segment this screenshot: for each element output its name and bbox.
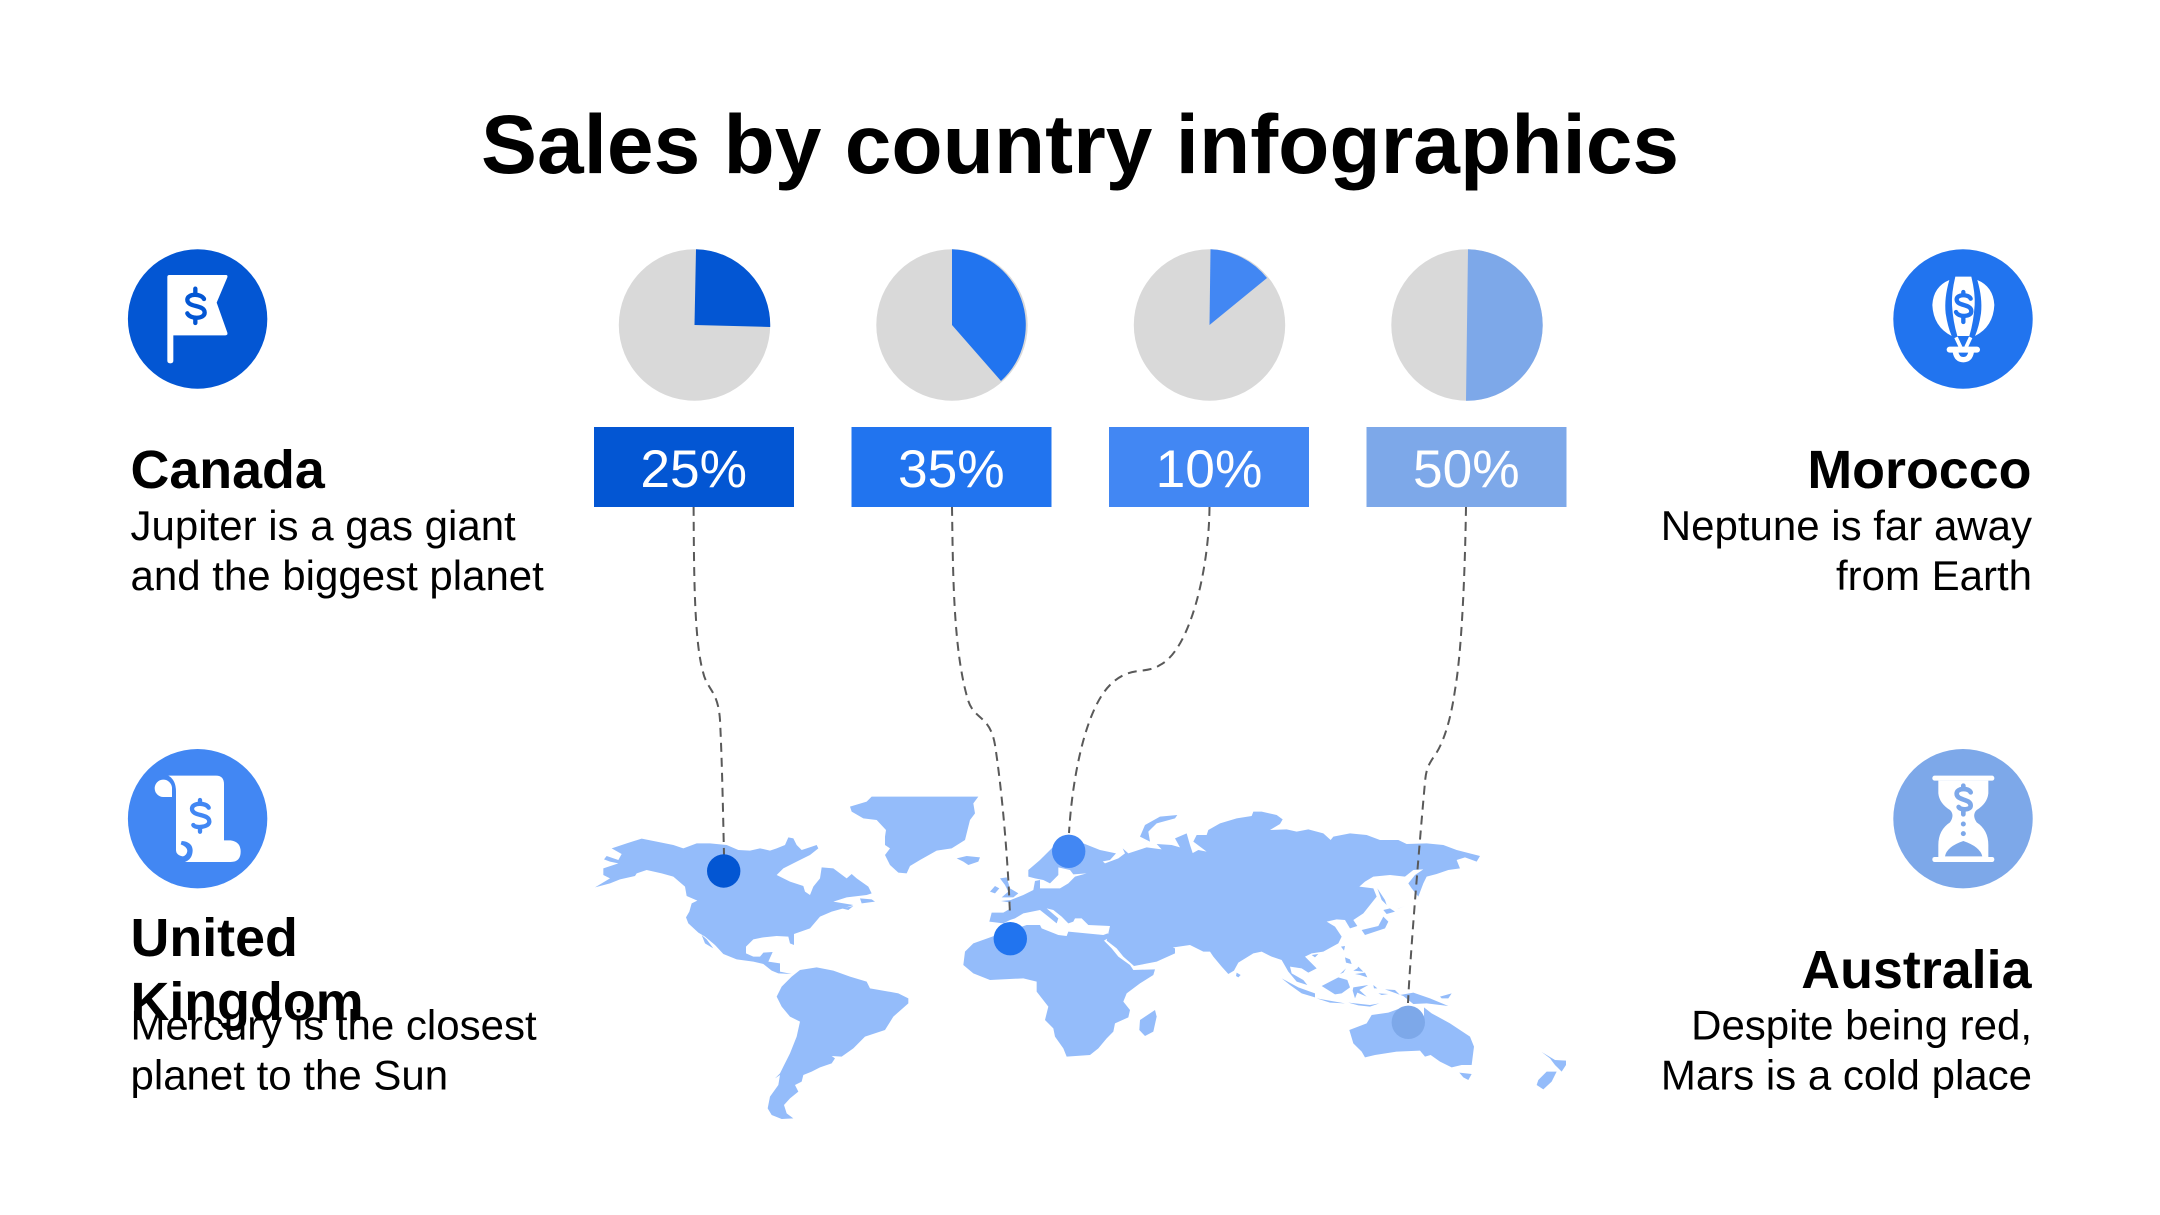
Canada text: Canada	[130, 440, 326, 500]
icon: hot air balloon with dollar	[1893, 249, 2033, 389]
map marker: United Kingdom	[1052, 835, 1085, 868]
Australia text: Mars is a cold place	[1661, 1052, 2032, 1098]
percent box: 10%: 10%	[1156, 440, 1262, 499]
United Kingdom text: United	[130, 908, 298, 968]
United Kingdom text	[130, 908, 537, 1098]
world map	[595, 797, 1566, 1119]
United Kingdom text: Kingdom	[130, 972, 364, 1032]
pie chart: 35%	[876, 249, 1028, 401]
pie chart: 10%	[1134, 249, 1285, 401]
title: Sales by country infographics	[481, 97, 1679, 191]
percent box: 25%: 25%	[640, 440, 747, 499]
icon: scroll with dollar	[128, 749, 267, 888]
Morocco text: Morocco	[1807, 440, 2032, 500]
Morocco text	[1661, 440, 2032, 599]
United Kingdom text: Mercury is the closest	[130, 1002, 537, 1048]
icon: flag with dollar	[128, 249, 267, 389]
Morocco text: Neptune is far away	[1661, 502, 2032, 549]
connector: Australia	[1408, 507, 1466, 1003]
percent box: 50%	[1366, 427, 1566, 507]
percent box: 10%	[1109, 427, 1309, 507]
map marker: Morocco	[994, 922, 1027, 955]
map marker: Australia	[1392, 1006, 1425, 1039]
percent box: 50%: 50%	[1413, 440, 1520, 499]
connector: Canada	[694, 507, 724, 855]
Canada text	[130, 440, 544, 599]
Canada text: Jupiter is a gas giant	[130, 502, 516, 549]
percent box: 35%	[852, 427, 1052, 507]
United Kingdom text: planet to the Sun	[130, 1052, 448, 1098]
percent box: 25%	[594, 427, 794, 507]
pie chart: 25%	[619, 249, 770, 401]
Australia text: Australia	[1801, 940, 2033, 1000]
Morocco text: from Earth	[1836, 552, 2032, 599]
Australia text: Despite being red,	[1691, 1002, 2032, 1048]
connector: Morocco	[952, 507, 1010, 915]
Australia text	[1661, 940, 2033, 1098]
Canada text: and the biggest planet	[130, 552, 544, 599]
icon: hourglass with dollar	[1893, 749, 2033, 888]
connector: United Kingdom	[1069, 507, 1210, 833]
percent box: 35%: 35%	[898, 440, 1005, 499]
pie chart: 50%	[1391, 249, 1543, 401]
map marker: Canada	[707, 854, 740, 888]
